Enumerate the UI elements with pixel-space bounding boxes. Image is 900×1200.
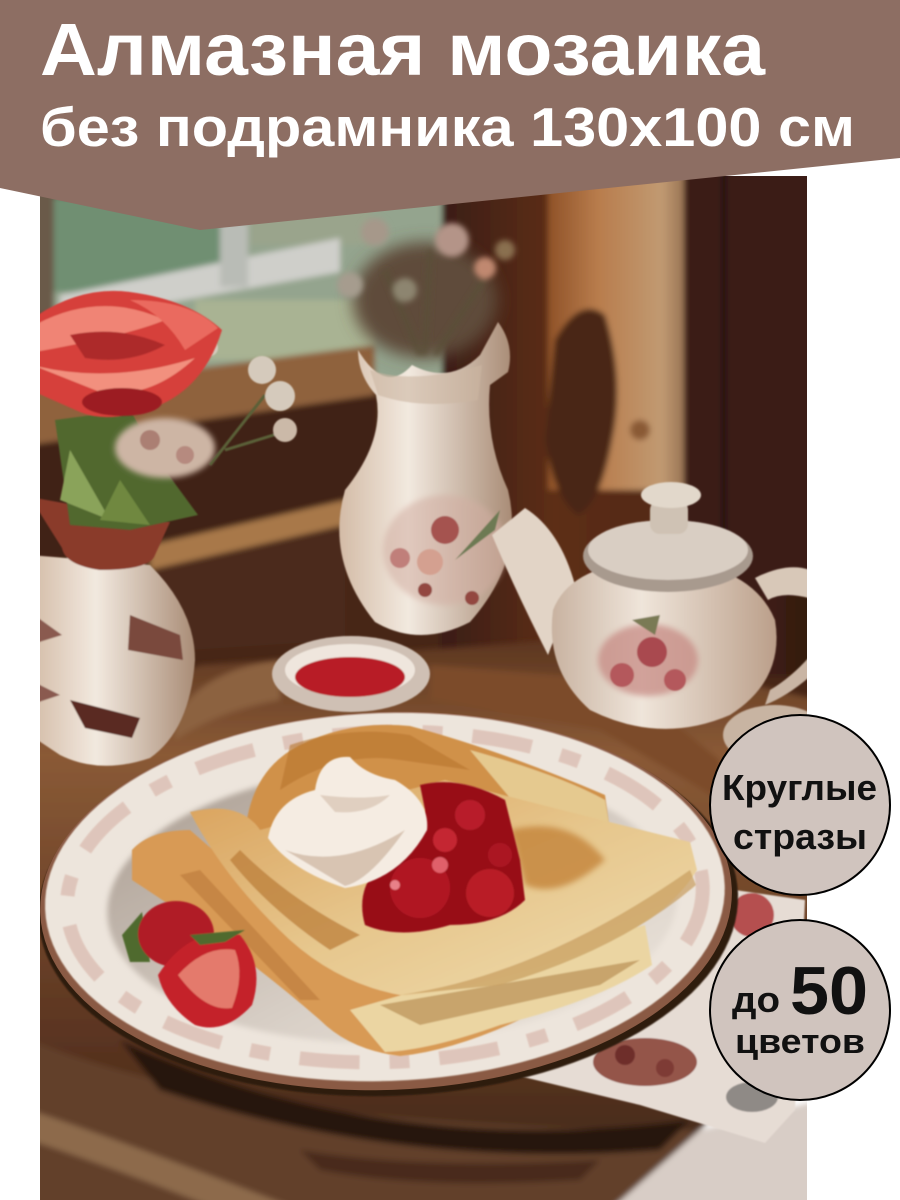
strawberries xyxy=(122,901,256,1028)
badge: up to 50 colours xyxy=(710,920,890,1100)
badge: up to 50 colours: до xyxy=(732,979,780,1020)
napkin xyxy=(515,890,805,1143)
crepes xyxy=(132,725,697,1056)
badge: round rhinestones: стразы xyxy=(733,816,867,857)
heading line 1: Алмазная мозаика xyxy=(40,8,766,91)
heading line 2: без подрамника 130х100 см xyxy=(40,96,855,158)
table xyxy=(30,640,820,1200)
badge: up to 50 colours: цветов xyxy=(735,1023,865,1061)
dried flowers in jug xyxy=(337,218,515,358)
badge: round rhinestones: Круглые xyxy=(722,767,877,808)
plate xyxy=(32,700,745,1108)
photo: pancakes still life xyxy=(30,170,827,1200)
teapot xyxy=(492,482,815,729)
small decorated vase xyxy=(30,497,195,766)
whipped cream xyxy=(268,757,427,888)
badge: up to 50 colours: 50 xyxy=(790,953,868,1029)
small cup at right xyxy=(722,704,807,749)
badge: round rhinestones xyxy=(710,715,890,895)
bouquet leaves and small flowers xyxy=(55,340,297,530)
top banner xyxy=(0,0,900,230)
wooden wall and window background xyxy=(30,170,820,716)
small bowl of jam xyxy=(272,636,430,712)
red rose xyxy=(30,291,222,417)
jam on crepes xyxy=(362,782,525,932)
large white jug xyxy=(339,322,512,635)
